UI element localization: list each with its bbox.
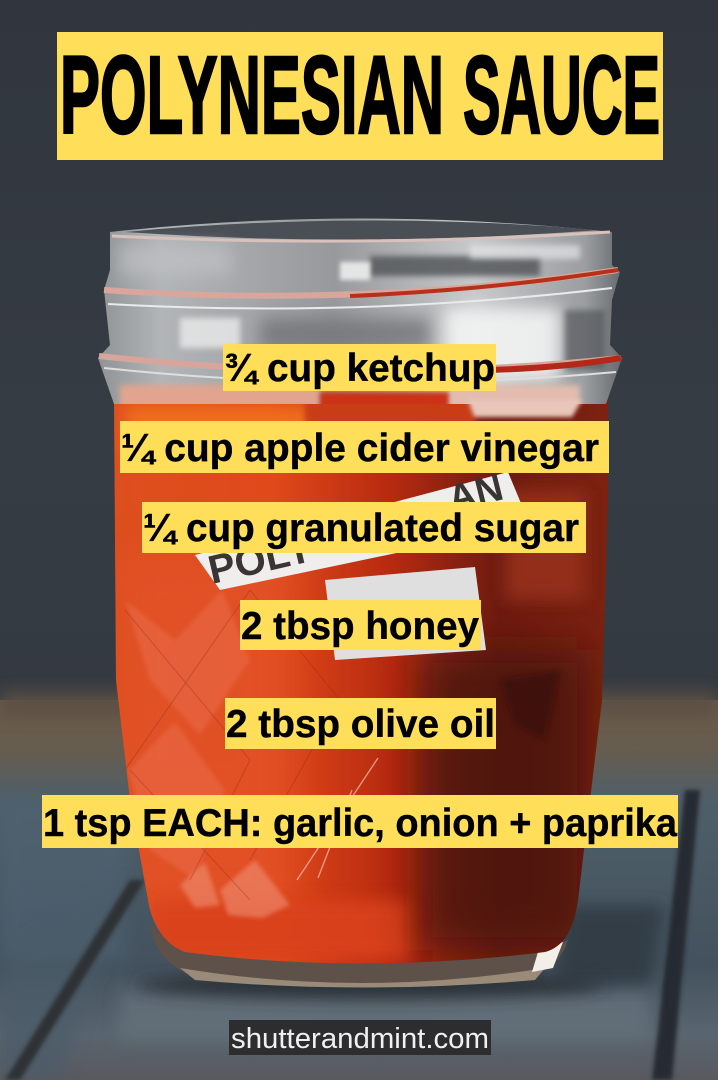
website credit: shutterandmint.com (231, 1023, 489, 1055)
ingredient: olive oil: 2 tbsp olive oil (226, 703, 495, 746)
ingredient: granulated sugar: ¼ cup granulated sugar (143, 507, 579, 550)
paper label (195, 467, 530, 660)
jar base glass (150, 925, 568, 988)
paper label: POLY (204, 526, 317, 593)
paper label: AN (444, 467, 507, 521)
pink residue below the rim (468, 400, 582, 417)
ingredient: apple cider vinegar: ¼ cup apple cider vinegar (121, 427, 599, 470)
ingredient: ketchup: ¾ cup ketchup (224, 347, 495, 390)
glass neck (98, 218, 622, 404)
ingredient: garlic, onion and paprika: 1 tsp EACH: garlic, onion + paprika (43, 802, 677, 845)
glass shading (120, 220, 605, 408)
sauce highlights and shadows (120, 400, 590, 960)
title banner (57, 32, 663, 160)
sauce body (114, 400, 608, 964)
jar rim rings (99, 232, 621, 383)
jar with sauce (98, 218, 622, 988)
ingredient: honey: 2 tbsp honey (241, 605, 479, 648)
